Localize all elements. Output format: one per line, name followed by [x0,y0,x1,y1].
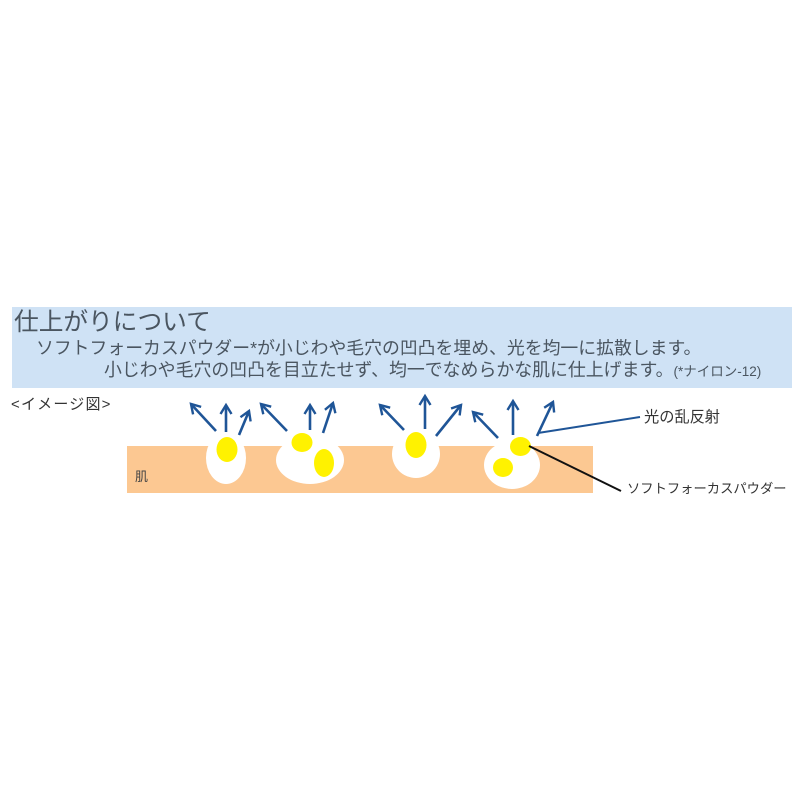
label: light scattering: 光の乱反射 [644,409,720,426]
pore 3 [392,430,440,478]
leader line: light scattering [538,417,640,433]
pore 2 [276,433,344,484]
leader line: soft focus powder [529,446,621,491]
image caption: <イメージ図> [11,396,112,413]
skin label: 肌 [135,469,148,484]
heading: 仕上がりについて [14,309,211,336]
label: soft focus powder: ソフトフォーカスパウダー [627,481,787,496]
skin layer [127,446,593,493]
pore 1 [206,432,246,484]
panel: finish description [12,307,792,388]
pore 4 [484,437,540,489]
text line 2: 小じわや毛穴の凹凸を目立たせず、均一でなめらかな肌に仕上げます。(*ナイロン-12) [104,360,761,380]
text line 1: ソフトフォーカスパウダー*が小じわや毛穴の凹凸を埋め、光を均一に拡散します。 [36,338,701,358]
light arrows [191,396,553,438]
